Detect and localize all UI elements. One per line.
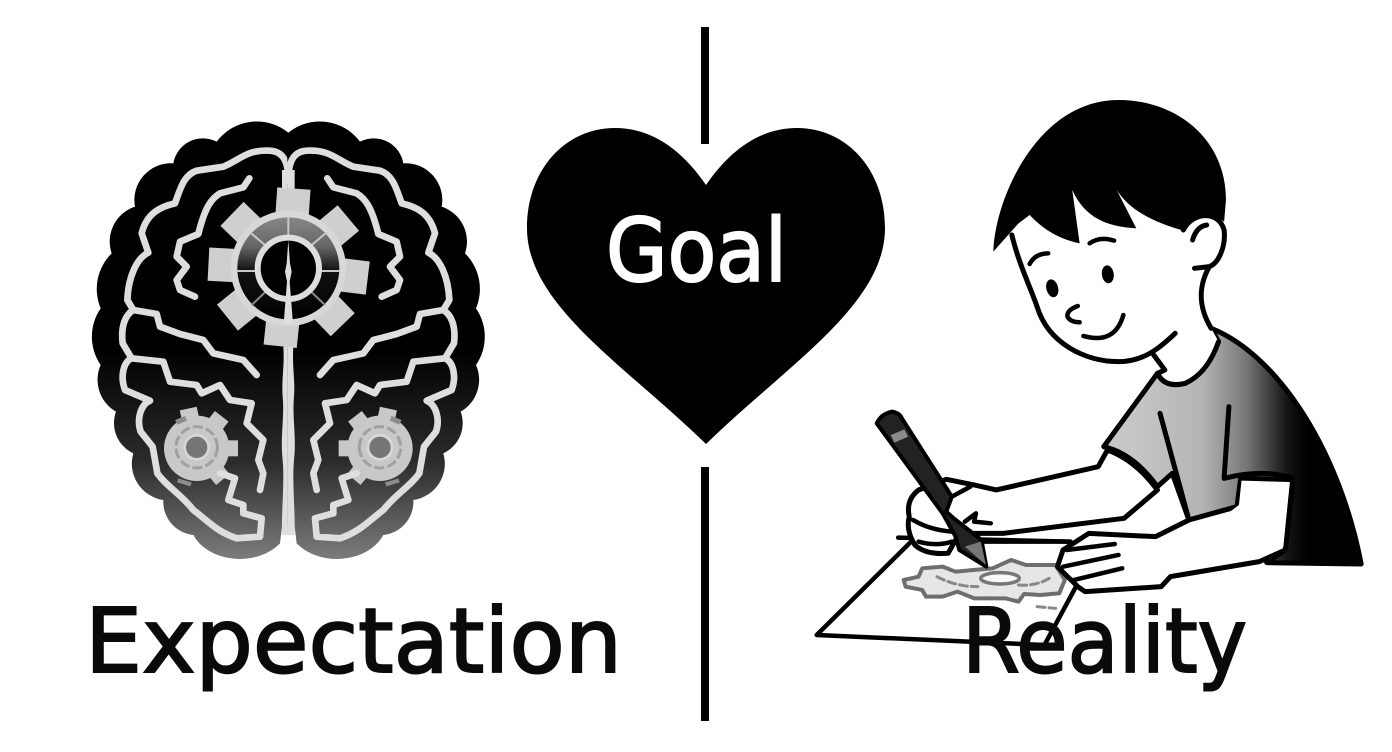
paper and drawn gear	[817, 538, 1076, 645]
pencil	[877, 412, 986, 567]
heart shape	[527, 128, 885, 444]
hair	[993, 100, 1226, 252]
label: Expectation: Expectation	[85, 589, 622, 693]
boy right arm and hand	[1057, 478, 1293, 592]
illustration: boy drawing a gear	[817, 100, 1361, 645]
divider: lower line	[701, 467, 709, 721]
large central gear	[208, 187, 370, 348]
eyes	[1044, 265, 1115, 298]
heart: goal	[527, 128, 885, 444]
boy torso and shirt	[1104, 328, 1361, 564]
panel: expectation	[85, 121, 622, 693]
brain right half	[287, 121, 485, 559]
boy left arm and hand	[877, 412, 1157, 567]
boy head	[993, 100, 1226, 385]
brain left half	[92, 121, 289, 559]
label: Goal: Goal	[606, 200, 787, 302]
panel: reality	[817, 100, 1361, 693]
icon: brain with gears	[92, 121, 485, 559]
label: Reality: Reality	[962, 589, 1247, 693]
divider: upper line	[701, 27, 709, 144]
eyebrows and nose and smile	[1030, 239, 1123, 338]
